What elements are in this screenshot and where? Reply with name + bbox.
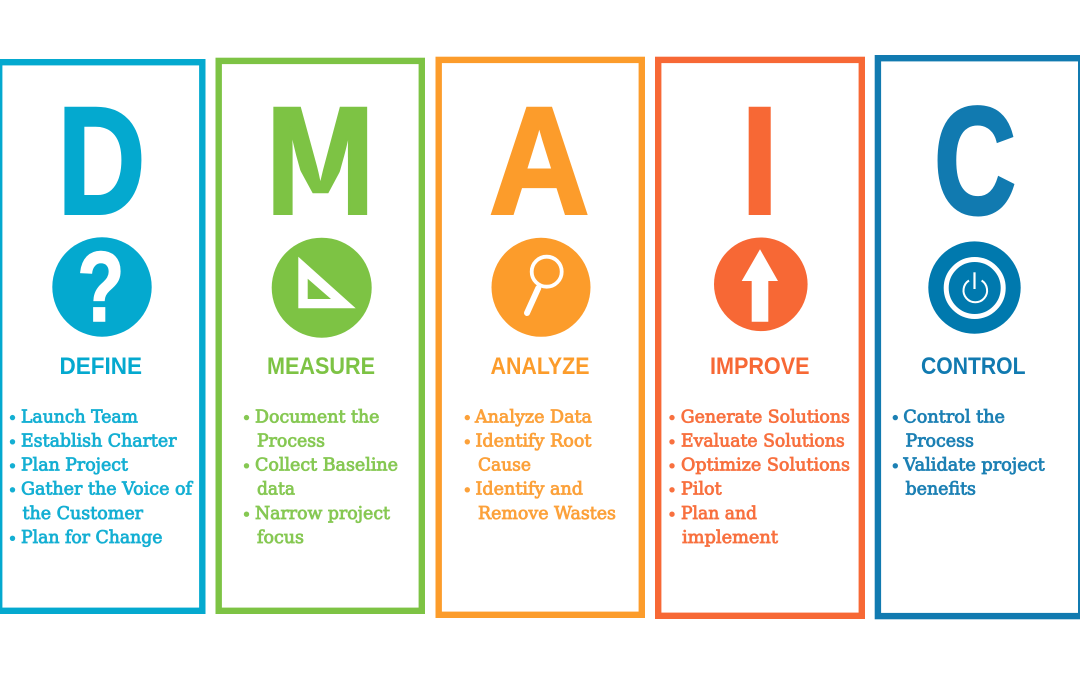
panel: analyze [439, 60, 642, 615]
big letter C: C [934, 75, 1016, 246]
list: define steps [10, 406, 193, 548]
panel border: analyze [439, 60, 642, 615]
heading: control: CONTROL [921, 353, 1026, 380]
icon: power button [928, 241, 1021, 334]
list: measure steps: Document the [255, 406, 380, 427]
list: improve steps: Generate Solutions [681, 406, 850, 427]
list: define steps: Establish Charter [21, 430, 177, 452]
list: control steps: Control the [903, 406, 1005, 427]
icon: question mark: ? [77, 232, 124, 342]
big letter I: I [741, 75, 778, 246]
panel: control [878, 58, 1080, 616]
list: improve steps: Optimize Solutions [681, 454, 850, 476]
list: measure steps: focus [257, 527, 304, 548]
icon: set square [272, 238, 372, 338]
panel border: define [0, 62, 202, 611]
panel border: measure [219, 61, 422, 611]
list: measure steps: Narrow project [255, 503, 391, 524]
list: control steps: Validate project [903, 454, 1045, 476]
list: analyze steps: Identify and [476, 479, 583, 500]
heading: define: DEFINE [60, 353, 142, 380]
list: measure steps: Collect Baseline [255, 454, 398, 476]
big letter D: D [58, 76, 145, 247]
list: measure steps: Process [257, 430, 325, 452]
list: analyze steps: Identify Root [476, 430, 592, 452]
big letter A: A [489, 75, 589, 246]
list: analyze steps: Remove Wastes [478, 503, 616, 524]
heading: improve: IMPROVE [710, 353, 810, 380]
list: improve steps [670, 406, 850, 548]
panel border: improve [658, 60, 862, 616]
list: define steps: the Customer [22, 503, 143, 524]
list: improve steps: Pilot [681, 479, 722, 500]
panel: improve [658, 60, 862, 616]
panel border: control [878, 58, 1080, 616]
list: control steps: Process [906, 430, 974, 452]
list: define steps: Launch Team [21, 406, 138, 427]
icon: up arrow [714, 237, 808, 331]
list: measure steps [244, 406, 398, 548]
list: control steps [893, 406, 1045, 500]
list: define steps: Plan for Change [21, 527, 162, 548]
list: improve steps: Plan and [681, 503, 757, 524]
list: improve steps: implement [682, 527, 779, 548]
list: analyze steps [465, 406, 616, 524]
heading: analyze: ANALYZE [490, 353, 590, 380]
list: define steps: Plan Project [21, 454, 129, 476]
list: improve steps: Evaluate Solutions [681, 430, 845, 452]
panel: measure [219, 61, 422, 611]
icon: magnifying glass [492, 238, 590, 337]
heading: measure: MEASURE [267, 353, 375, 380]
list: define steps: Gather the Voice of [21, 479, 193, 500]
big letter M: M [266, 76, 375, 247]
list: measure steps: data [257, 479, 295, 500]
list: analyze steps: Cause [478, 454, 531, 476]
panel: define [0, 62, 202, 611]
list: analyze steps: Analyze Data [474, 406, 592, 427]
icon: question mark [52, 232, 152, 342]
list: control steps: benefits [906, 479, 976, 500]
